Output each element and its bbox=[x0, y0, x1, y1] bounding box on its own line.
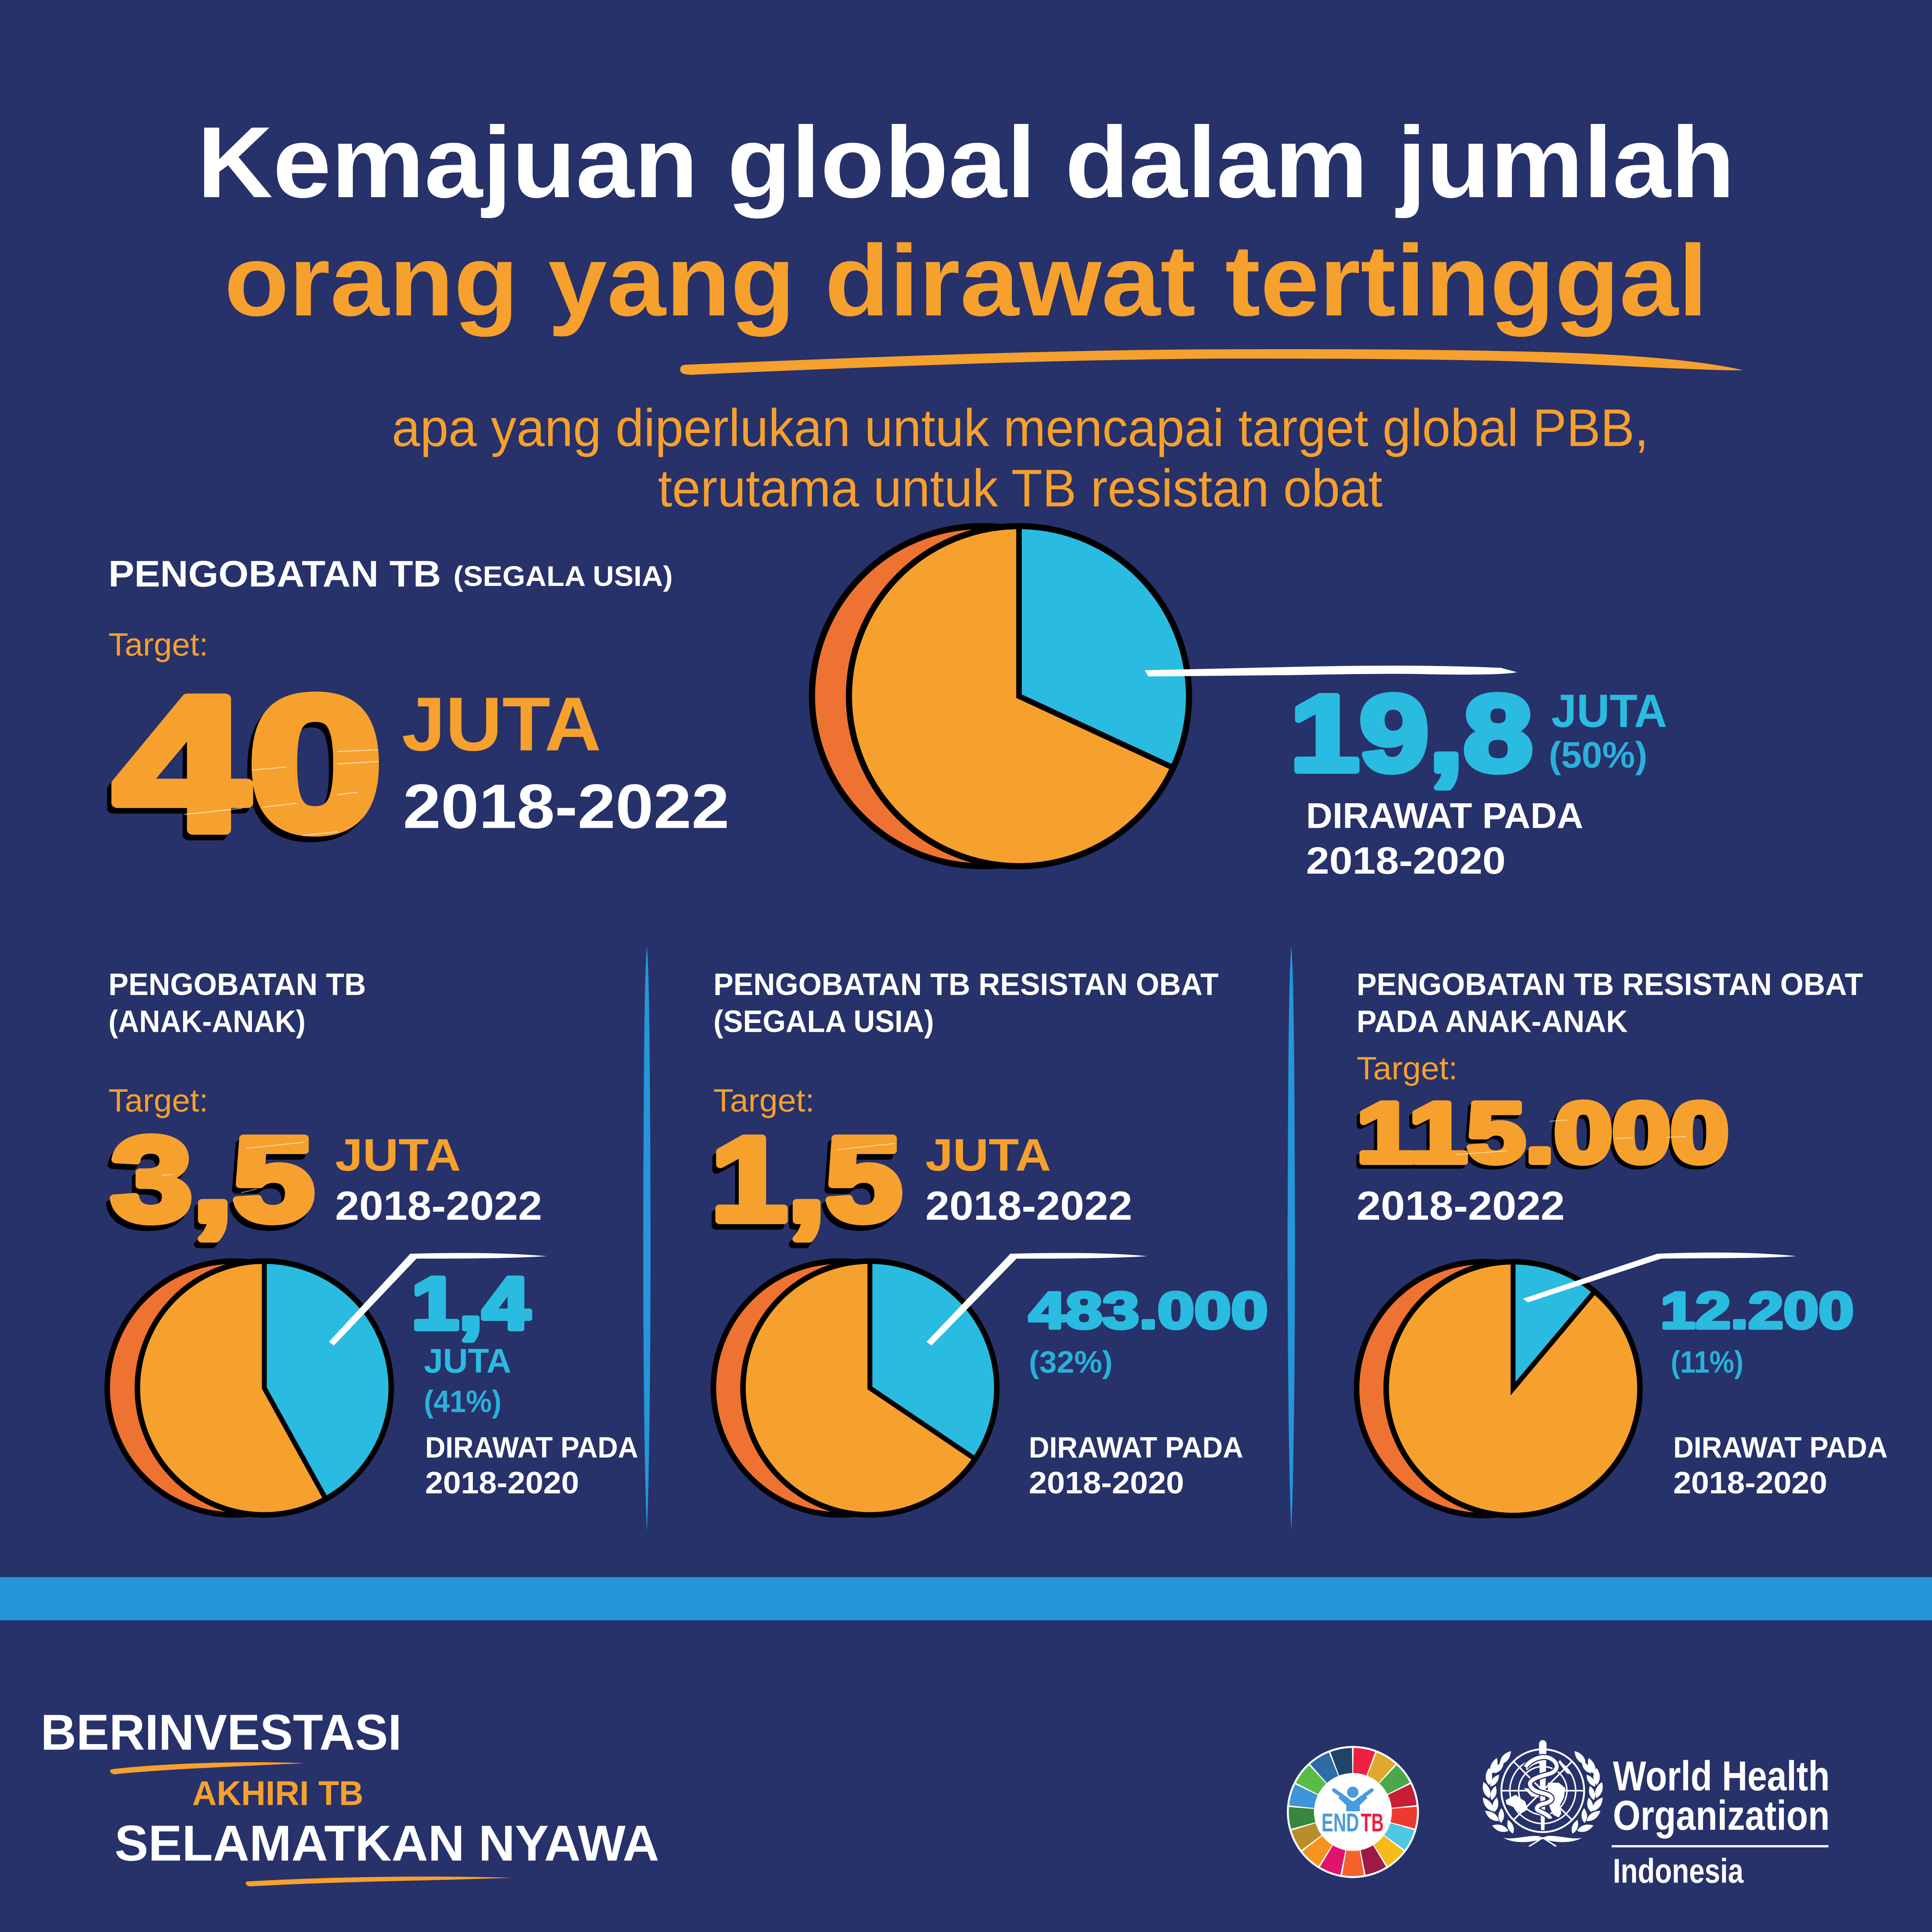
logo: End TB wheel bbox=[1280, 1739, 1426, 1885]
logo wordmark: TB bbox=[1361, 1808, 1384, 1837]
target label: Target: bbox=[1357, 1050, 1458, 1086]
heading bbox=[108, 553, 673, 594]
target label: Target: bbox=[108, 627, 208, 662]
target number: 3,5 bbox=[111, 1112, 314, 1246]
logo: WHO emblem bbox=[1480, 1740, 1605, 1846]
target number 40: 40 bbox=[110, 662, 378, 876]
leader line bbox=[1144, 666, 1517, 676]
logo: WHO wordmark: World Health bbox=[1613, 1753, 1830, 1800]
JUTA: JUTA bbox=[925, 1130, 1051, 1181]
staff bbox=[1539, 1740, 1546, 1830]
unit JUTA: JUTA bbox=[1551, 685, 1667, 737]
percent: (32%) bbox=[1029, 1345, 1113, 1379]
subtitle: terutama untuk TB resistan obat bbox=[658, 458, 1382, 518]
divider 2 bbox=[1288, 946, 1295, 1532]
pie chart bbox=[1357, 1262, 1640, 1515]
slogan: BERINVESTASI bbox=[41, 1704, 402, 1761]
title underline bbox=[680, 349, 1744, 375]
treated caption: DIRAWAT PADA bbox=[1673, 1431, 1888, 1464]
heading: PENGOBATAN TB bbox=[108, 553, 441, 594]
years: 2018-2022 bbox=[403, 772, 730, 842]
heading: (SEGALA USIA) bbox=[713, 1004, 934, 1039]
heading bbox=[713, 967, 1219, 1039]
target number: 1,5 bbox=[707, 1118, 898, 1252]
subtitle bbox=[392, 398, 1649, 518]
ribbon bbox=[1503, 1836, 1582, 1846]
leader line bbox=[1523, 1253, 1796, 1302]
treated caption: DIRAWAT PADA bbox=[425, 1431, 638, 1464]
pie chart bbox=[812, 526, 1189, 866]
treated caption: 2018-2020 bbox=[1673, 1466, 1827, 1500]
value: 1,4 bbox=[412, 1262, 530, 1344]
panel: drug-resistant TB children bbox=[1353, 967, 1888, 1515]
treated caption: DIRAWAT PADA bbox=[1029, 1431, 1243, 1464]
slogan: AKHIRI TB bbox=[192, 1774, 363, 1813]
heading bbox=[108, 967, 366, 1039]
years: 2018-2022 bbox=[925, 1184, 1132, 1229]
leader line bbox=[329, 1253, 547, 1346]
divider 1 bbox=[643, 946, 651, 1532]
slogan: SELAMATKAN NYAWA bbox=[115, 1814, 659, 1871]
target number 40: 40 bbox=[114, 657, 383, 870]
treated caption bbox=[1673, 1431, 1888, 1500]
JUTA: JUTA bbox=[402, 682, 601, 767]
slogan bbox=[41, 1704, 659, 1887]
percent: (50%) bbox=[1549, 735, 1647, 776]
treated caption bbox=[425, 1431, 638, 1500]
treated caption bbox=[1029, 1431, 1243, 1500]
target number: 3,5 bbox=[107, 1118, 311, 1252]
subtitle: apa yang diperlukan untuk mencapai target global PBB, bbox=[392, 398, 1649, 457]
target label: Target: bbox=[713, 1082, 814, 1118]
logo wordmark: END bbox=[1322, 1808, 1359, 1837]
panel: drug-resistant TB all ages bbox=[707, 967, 1268, 1515]
pie chart bbox=[107, 1261, 391, 1515]
heading: PADA ANAK-ANAK bbox=[1357, 1004, 1628, 1039]
treated caption: 2018-2020 bbox=[425, 1466, 579, 1500]
unit: JUTA bbox=[424, 1342, 511, 1380]
logo: WHO wordmark: Organization bbox=[1613, 1792, 1830, 1839]
JUTA: JUTA bbox=[335, 1130, 461, 1181]
percent: (41%) bbox=[424, 1385, 501, 1419]
target number: 1,5 bbox=[711, 1112, 902, 1246]
target number: 115.000 bbox=[1357, 1085, 1729, 1180]
treated caption: 2018-2020 bbox=[1029, 1466, 1184, 1500]
target number: 115.000 bbox=[1353, 1089, 1726, 1184]
heading: (SEGALA USIA) bbox=[454, 560, 673, 592]
percent: (11%) bbox=[1671, 1345, 1744, 1379]
laurel wreath left bbox=[1480, 1749, 1515, 1835]
logo: WHO wordmark: Indonesia bbox=[1613, 1852, 1744, 1891]
years: 2018-2022 bbox=[1357, 1184, 1565, 1229]
brush underline 1 bbox=[110, 1762, 304, 1774]
title line 1: Kemajuan global dalam jumlah bbox=[197, 106, 1735, 219]
treated caption: 2018-2020 bbox=[1306, 839, 1506, 882]
panel: TB treatment all ages bbox=[108, 526, 1667, 882]
pie chart bbox=[713, 1261, 997, 1515]
laurel wreath right bbox=[1570, 1749, 1605, 1835]
title line 2: orang yang dirawat tertinggal bbox=[224, 225, 1708, 337]
title bbox=[197, 106, 1744, 375]
heading: PENGOBATAN TB RESISTAN OBAT bbox=[713, 967, 1219, 1002]
years: 2018-2022 bbox=[335, 1184, 542, 1229]
heading: PENGOBATAN TB RESISTAN OBAT bbox=[1357, 967, 1863, 1002]
value: 12.200 bbox=[1660, 1282, 1854, 1340]
heading: PENGOBATAN TB bbox=[108, 967, 366, 1002]
treated caption: DIRAWAT PADA bbox=[1306, 796, 1583, 836]
treated caption bbox=[1306, 796, 1583, 882]
heading: (ANAK-ANAK) bbox=[108, 1004, 305, 1039]
globe continents bbox=[1506, 1757, 1572, 1818]
value: 483.000 bbox=[1029, 1282, 1268, 1340]
heading bbox=[1357, 967, 1863, 1039]
value 19,8: 19,8 bbox=[1290, 673, 1533, 794]
brush underline 2 bbox=[246, 1876, 511, 1887]
serpent bbox=[1526, 1757, 1557, 1819]
blue band bbox=[0, 1577, 1932, 1620]
target label: Target: bbox=[108, 1082, 208, 1118]
leader line bbox=[927, 1253, 1147, 1346]
person icon bbox=[1334, 1787, 1372, 1811]
logo: WHO wordmark bbox=[1612, 1753, 1830, 1891]
panel: TB treatment children bbox=[107, 967, 638, 1515]
